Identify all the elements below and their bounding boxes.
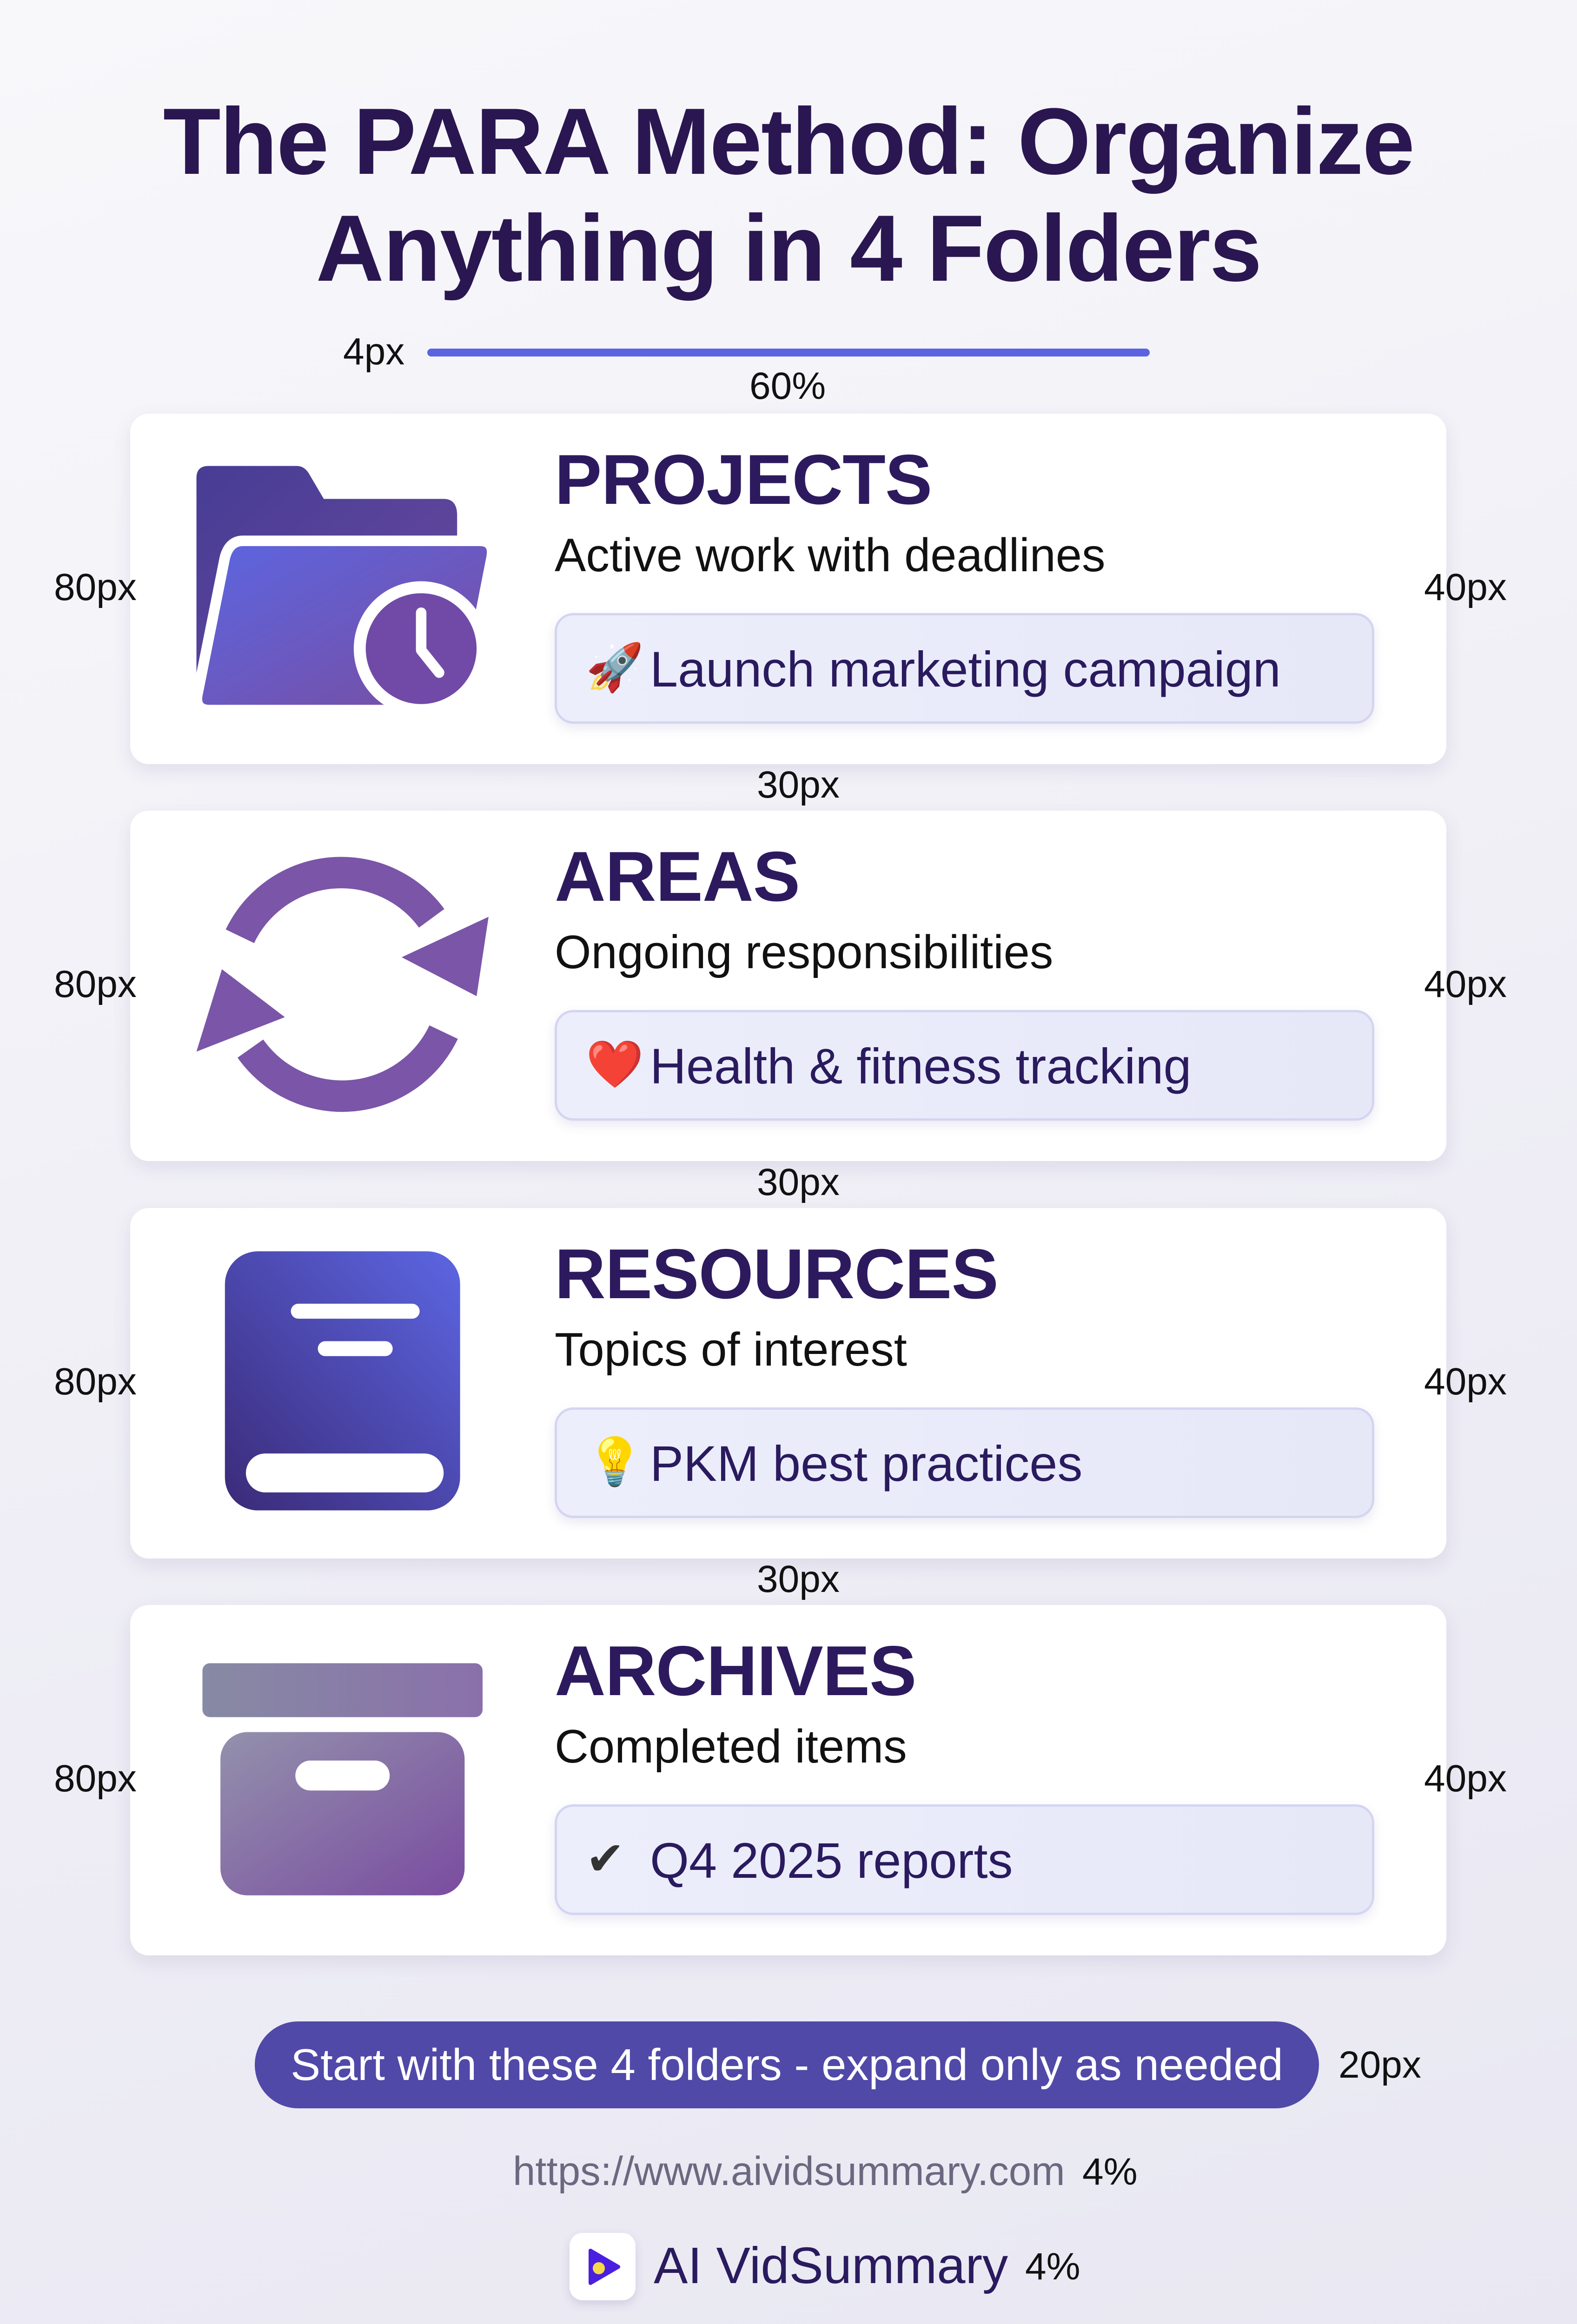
example pill: ✔ [586, 1833, 625, 1885]
example pill: PKM best practices [650, 1435, 1082, 1492]
callout: bottom banner: Start with these 4 folders - expand only as needed [291, 2040, 1283, 2090]
example pill [555, 613, 1374, 724]
description: Ongoing responsibilities [555, 926, 1053, 978]
annotation: 4px: 4px [343, 330, 404, 373]
annotation: 40px: 40px [1424, 1757, 1507, 1800]
annotation: 80px: 80px [54, 1757, 137, 1800]
example pill: 💡 [586, 1436, 644, 1488]
annotation: 80px: 80px [54, 963, 137, 1005]
title [0, 88, 1577, 302]
heading: PROJECTS [555, 440, 932, 519]
description: Topics of interest [555, 1324, 907, 1376]
annotation: 4%: 4% [1082, 2151, 1138, 2193]
icon: refresh arrows [187, 846, 495, 1116]
icon: folder with clock [187, 449, 495, 719]
callout: bottom banner [255, 2021, 1319, 2108]
annotation: 30px: 30px [757, 1161, 840, 1203]
example pill: Launch marketing campaign [650, 641, 1281, 697]
annotation: 4%: 4% [1025, 2245, 1080, 2288]
logo [570, 2233, 1016, 2300]
panel: resources [130, 1208, 1446, 1558]
footer url: https://www.aividsummary.com [513, 2149, 1065, 2194]
heading: ARCHIVES [555, 1631, 916, 1710]
title: Anything in 4 Folders [316, 196, 1261, 301]
example pill: ❤️ [586, 1038, 644, 1090]
example pill [555, 1407, 1374, 1518]
annotation: 40px: 40px [1424, 1360, 1507, 1403]
icon: play logo [570, 2233, 636, 2300]
example pill: Q4 2025 reports [650, 1832, 1013, 1888]
annotation: 60%: 60% [749, 365, 826, 407]
title underline [427, 349, 1150, 357]
brand name: AI VidSummary [654, 2237, 1008, 2294]
annotation: 30px: 30px [757, 764, 840, 806]
annotation: 80px: 80px [54, 1360, 137, 1403]
example pill [555, 1010, 1374, 1121]
description: Completed items [555, 1721, 907, 1773]
annotation: 30px: 30px [757, 1558, 840, 1600]
example pill: Health & fitness tracking [650, 1038, 1192, 1094]
heading: RESOURCES [555, 1235, 998, 1314]
description: Active work with deadlines [555, 529, 1105, 581]
annotation: 20px: 20px [1338, 2044, 1421, 2086]
heading: AREAS [555, 837, 800, 916]
title: The PARA Method: Organize [163, 89, 1414, 194]
panel: archives [130, 1605, 1446, 1955]
example pill: 🚀 [586, 641, 644, 693]
annotation: 80px: 80px [54, 566, 137, 608]
annotation: 40px: 40px [1424, 566, 1507, 608]
icon: book [187, 1244, 495, 1513]
example pill [555, 1804, 1374, 1915]
panel: areas [130, 811, 1446, 1161]
icon: archive box [187, 1641, 495, 1910]
panel: projects [130, 414, 1446, 764]
annotation: 40px: 40px [1424, 963, 1507, 1005]
